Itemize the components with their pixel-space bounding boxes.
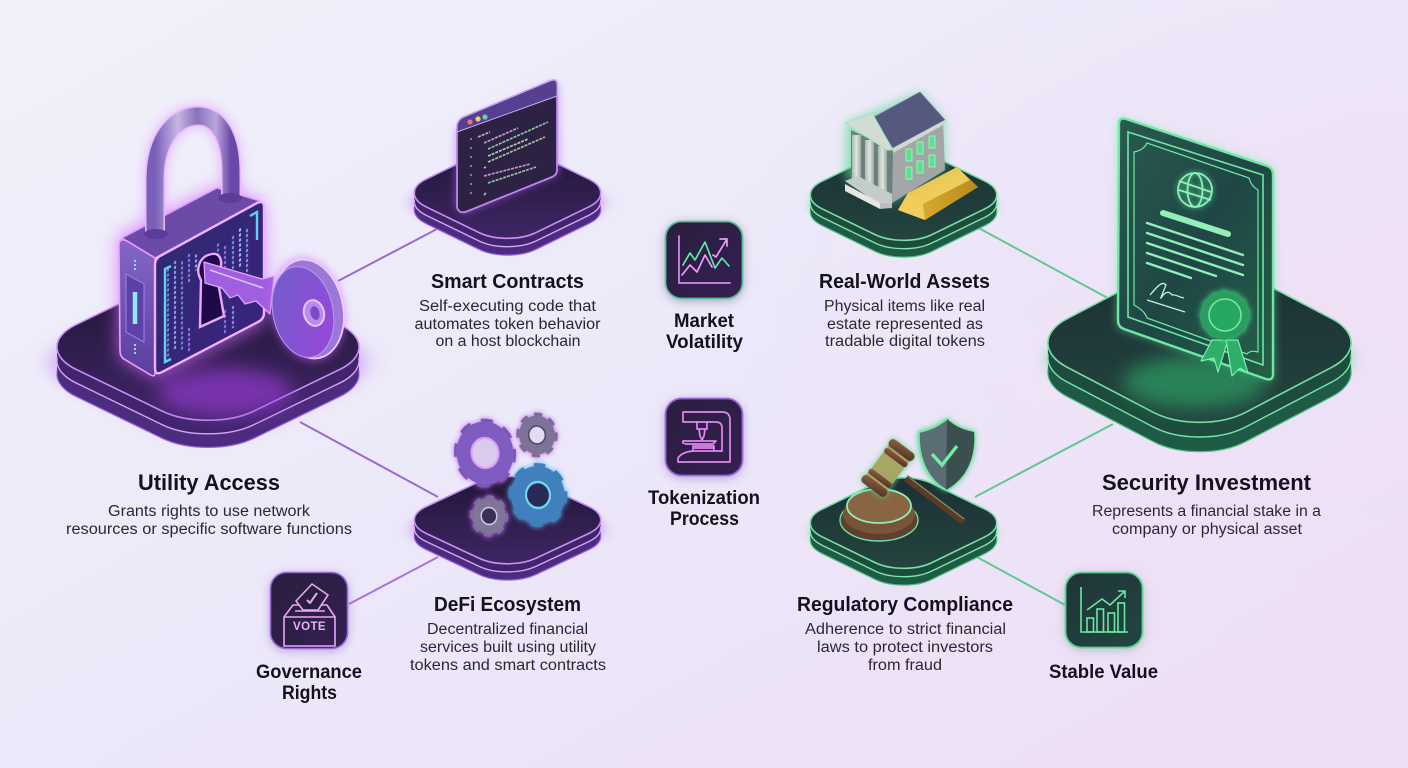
platform: smart contracts [398, 140, 617, 263]
connector: utility access to smart contracts [338, 229, 437, 281]
heading: tokenization process: Process [670, 509, 739, 530]
icon: gavel and shield [840, 419, 974, 541]
heading: real-world assets: Real-World Assets [819, 271, 990, 293]
panel: governance rights [256, 572, 362, 704]
description: smart contracts: on a host blockchain [436, 333, 580, 350]
heading: market volatility: Volatility [666, 332, 743, 353]
description: utility access: Grants rights to use network [108, 503, 310, 520]
code rain on lock face [168, 225, 247, 362]
icon: gears [455, 414, 566, 536]
gear: blue [510, 465, 566, 525]
description: smart contracts [414, 298, 600, 350]
description: regulatory compliance: Adherence to strict financial [805, 621, 1006, 638]
heading: tokenization process: Tokenization [648, 488, 760, 509]
heading: market volatility: Market [674, 311, 735, 332]
connector: regulatory compliance to security investment [975, 424, 1113, 497]
heading: tokenization process [648, 488, 760, 530]
signature [1147, 283, 1185, 312]
description: utility access: resources or specific software functions [66, 521, 352, 538]
icon: padlock and key [119, 116, 353, 377]
shield [919, 419, 974, 490]
panel: smart contracts [398, 80, 617, 350]
heading: governance rights: Governance [256, 662, 362, 683]
icon: bank and gold bar [845, 92, 978, 220]
gear: small grey top [517, 414, 557, 456]
connector: real-world assets to security investment [975, 226, 1115, 302]
sound block [840, 499, 918, 541]
description: DeFi ecosystem: tokens and smart contracts [410, 657, 606, 674]
panel: stable value [1049, 572, 1158, 683]
description: real-world assets: Physical items like real [824, 298, 985, 315]
gear: small grey bottom [471, 496, 507, 536]
heading: stable value: Stable Value [1049, 662, 1158, 683]
platform: real-world assets [794, 142, 1013, 265]
description: security investment [1092, 503, 1321, 538]
platform: DeFi ecosystem [398, 468, 617, 588]
heading: smart contracts: Smart Contracts [431, 271, 584, 293]
description: regulatory compliance [805, 621, 1006, 674]
gear: large purple [455, 421, 515, 485]
icon tile: growth chart [1065, 572, 1143, 650]
description: DeFi ecosystem: Decentralized financial [427, 621, 588, 638]
ballot box label: VOTE [293, 621, 326, 633]
description: security investment: company or physical asset [1112, 521, 1303, 538]
heading: governance rights: Rights [282, 683, 337, 704]
panel: regulatory compliance [794, 419, 1013, 674]
wax seal [1202, 292, 1248, 338]
platform reflection [1123, 356, 1267, 408]
platform: security investment [1021, 250, 1378, 466]
bank side wall [892, 122, 945, 203]
gold bar [898, 167, 978, 220]
description: smart contracts: automates token behavior [414, 316, 600, 333]
handle [906, 478, 964, 522]
panel: utility access [30, 116, 386, 538]
connector: utility access to DeFi ecosystem [300, 422, 438, 497]
hammer head [860, 437, 916, 499]
heading: regulatory compliance: Regulatory Compliance [797, 594, 1013, 616]
panel: real-world assets [794, 92, 1013, 350]
ribbon [1201, 340, 1248, 376]
bank portico [851, 130, 893, 195]
description: security investment: Represents a financial stake in a [1092, 503, 1321, 520]
description: utility access [66, 503, 352, 538]
connector: regulatory compliance to stable value [975, 556, 1065, 605]
panel: DeFi ecosystem [398, 414, 617, 674]
description: smart contracts: Self-executing code that [419, 298, 597, 315]
description: regulatory compliance: from fraud [868, 657, 942, 674]
heading: governance rights [256, 662, 362, 704]
icon tile: volatility chart [665, 222, 743, 301]
platform: regulatory compliance [794, 470, 1013, 593]
panel: tokenization process [648, 398, 760, 530]
icon tile: tokenization machine [665, 398, 743, 478]
heading: market volatility [666, 311, 743, 353]
icon: certificate [1118, 118, 1273, 380]
connector: governance rights to DeFi ecosystem [349, 557, 438, 604]
heading: security investment: Security Investment [1102, 470, 1312, 495]
description: real-world assets: estate represented as [827, 316, 983, 333]
certificate text lines [1147, 213, 1243, 278]
platform: utility access [30, 261, 386, 460]
panel: security investment [1021, 118, 1378, 538]
heading: utility access: Utility Access [138, 470, 280, 495]
panel: market volatility [665, 222, 743, 353]
description: real-world assets: tradable digital tokens [825, 333, 985, 350]
description: DeFi ecosystem [410, 621, 606, 674]
description: regulatory compliance: laws to protect investors [817, 639, 993, 656]
description: real-world assets [824, 298, 985, 350]
icon: code window [457, 80, 558, 212]
platform reflection [157, 368, 293, 416]
heading: DeFi ecosystem: DeFi Ecosystem [434, 594, 581, 616]
bank steps [845, 176, 892, 205]
globe [1178, 173, 1212, 207]
description: DeFi ecosystem: services built using utility [420, 639, 596, 656]
